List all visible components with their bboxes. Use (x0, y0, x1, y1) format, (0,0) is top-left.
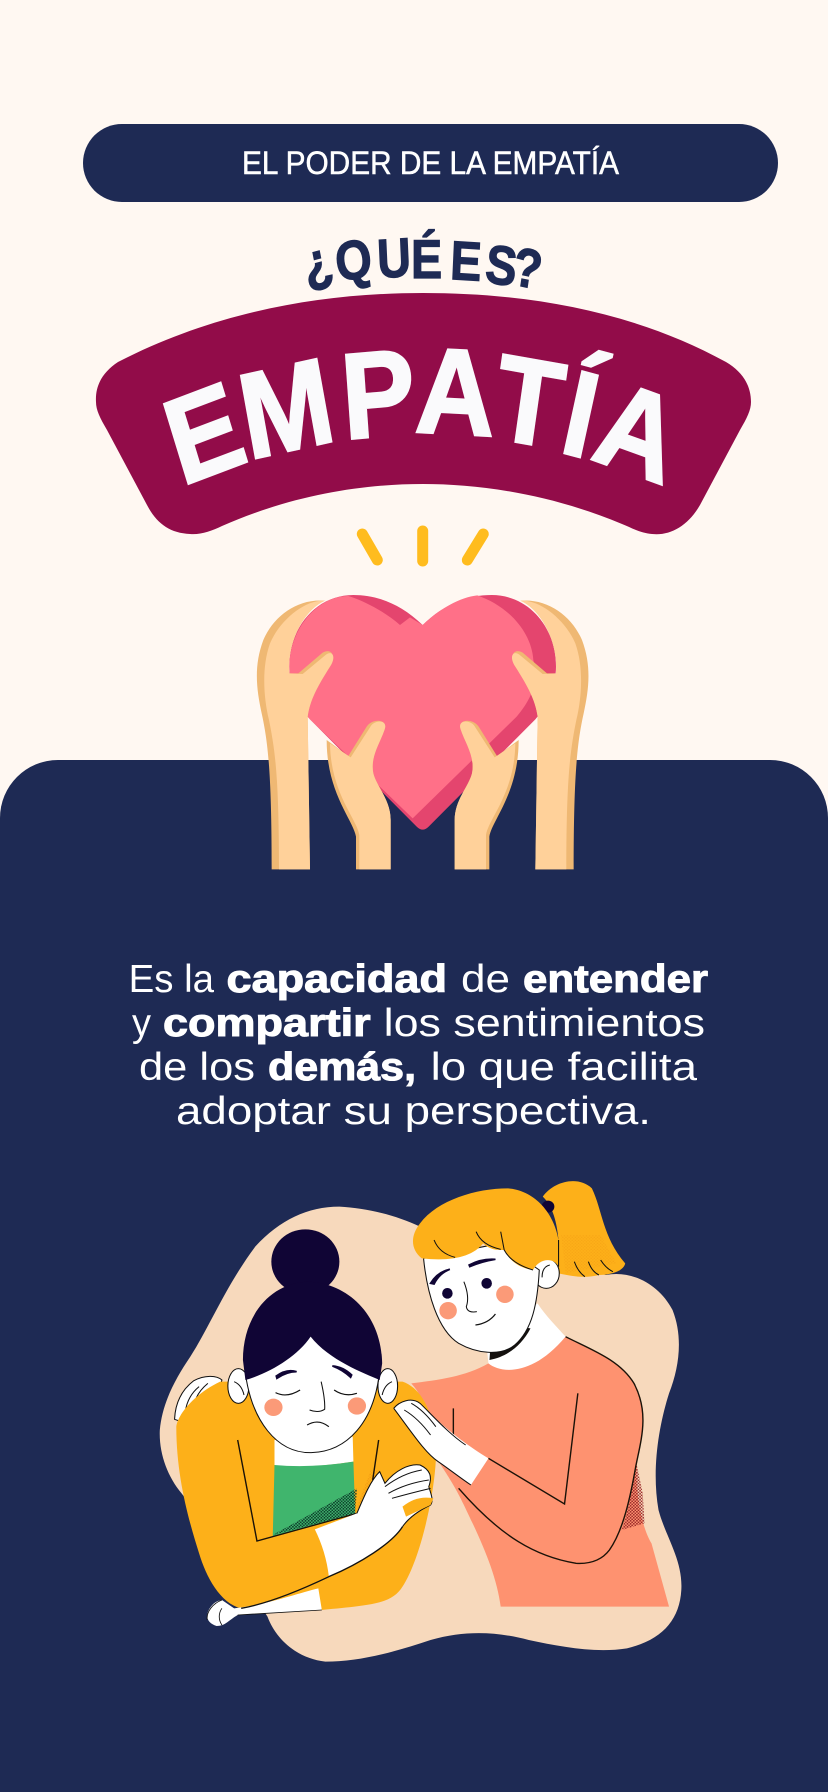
right woman: hand and wrist on shoulder (394, 1400, 488, 1485)
definition text: y (132, 1002, 151, 1045)
definition text: capacidad (226, 958, 447, 1001)
header pill: EL PODER DE LA EMPATÍA (242, 145, 620, 181)
right woman: hand on shoulder (behind left woman's back) (175, 1376, 222, 1422)
right woman: ponytail (542, 1181, 625, 1277)
definition text: entender (523, 958, 708, 1001)
right inner hand (455, 721, 519, 869)
right woman: neck (487, 1303, 566, 1370)
definition text: lo que facilita (431, 1046, 697, 1089)
heart (289, 595, 556, 830)
right woman: body (411, 1337, 669, 1607)
definition text: adoptar su perspectiva. (176, 1090, 651, 1133)
banner: empatía: EMPATÍA (150, 322, 695, 511)
definition text: Es la (129, 958, 214, 1001)
definition text: de los (139, 1046, 255, 1089)
right outer hand (512, 600, 588, 869)
panel: navy lower section (0, 760, 828, 1792)
icon: shine rays (362, 531, 483, 561)
left woman: head (228, 1229, 398, 1453)
right woman: neck shadow (489, 1327, 531, 1360)
definition text (129, 958, 708, 1133)
left outer hand (257, 600, 333, 869)
definition text: los sentimientos (384, 1002, 705, 1045)
background blob (160, 1207, 681, 1662)
header pill (83, 124, 778, 202)
left woman: jacket (176, 1382, 436, 1610)
banner: empatía (96, 293, 751, 534)
definition text: de (461, 958, 510, 1001)
icon: hands holding heart (257, 595, 588, 869)
heading: question: ¿QUÉ ES? (297, 226, 546, 302)
illustration: friend comforting a sad woman (160, 1181, 681, 1662)
right woman: head (413, 1188, 559, 1352)
left inner hand (327, 721, 391, 869)
left woman: arms (207, 1465, 433, 1626)
definition text: compartir (163, 1002, 371, 1045)
definition text: demás, (268, 1046, 416, 1089)
